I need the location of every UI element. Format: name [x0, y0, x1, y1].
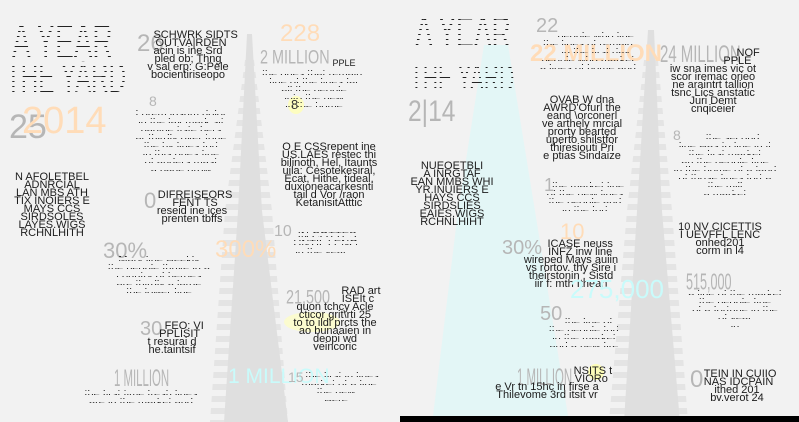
title: left copy: A YEAR [12, 13, 113, 69]
stat: 0 TEIN: TEIN IN CUIIO [704, 368, 776, 380]
stat: 15 left lower [288, 369, 379, 406]
stat: 2 million people: 2 MILLION [260, 46, 330, 68]
stat: 21,500: ISEIt c [342, 293, 374, 305]
stat: O E CSS block: Ecat, Hithe, tideal, [284, 173, 374, 185]
stat: 8 left [135, 93, 227, 176]
stat: 1 million right: NSITS t [574, 365, 612, 377]
stat: 10 right: I UEVFFL LENC [680, 229, 760, 241]
stat: 8 right: line was to line in it [679, 140, 771, 152]
stat: 1 million left: are in the market and [89, 396, 193, 408]
stat: 0 TEIN [690, 366, 776, 404]
stat: O E CSS block: O E CSSrepent ine [282, 141, 376, 153]
stat: 8 left: pagine tiste bers [141, 124, 221, 136]
stat: 1 million right: VIORo [575, 373, 608, 385]
callout: 300%: 300% [215, 236, 276, 263]
stat: 15 left lower: the new [317, 386, 355, 398]
stat: 50: and a new fire [549, 340, 619, 352]
stat: 8 left: Lorem ipsum dolor [135, 108, 227, 120]
stat: 30%: the people thrive in a [108, 262, 210, 274]
year number: left: 25 [9, 108, 47, 146]
title: right copy: A YEAR [415, 6, 511, 58]
title: right copy: THE YARD [410, 54, 514, 101]
stat: 50: the people fort [549, 324, 619, 336]
text block: right intro: SIRDSLIES [423, 200, 481, 212]
stat: 0 DIFREISEORS: prenten tbffs [162, 213, 222, 225]
stat: 10 right: onhed201 [696, 237, 744, 249]
stat: 24 million: ne araintrt tallion [672, 79, 754, 91]
stat: OVAR WARD: OVAB W dna [550, 94, 614, 106]
stat: 24 million: tsnc Lics anstatic [671, 87, 755, 99]
stat: 0 TEIN: 0 [690, 366, 703, 393]
stat: 30% right: ICASE neuss [547, 238, 613, 250]
text block: left intro: LAN MBS ATH [16, 187, 88, 199]
stat: 30 FEO: 30 [140, 318, 162, 340]
text block: right intro: NUEOETBLI [421, 160, 483, 172]
stat: 30% right: INFZ inw line [548, 246, 612, 258]
text block: left intro: RCHNLHITH [20, 227, 84, 239]
stat: 30% right: iir f: mth Ithean [535, 278, 607, 290]
text block: right intro: EAN MMBS WHI [410, 176, 494, 188]
stat: OVAR WARD: prorty bearted [548, 126, 616, 138]
stat: 30% right [502, 237, 618, 290]
stat: 30%: country of heroes [116, 270, 202, 282]
stat: 515,000: of year [718, 312, 752, 324]
stat: 30 FEO [140, 318, 204, 356]
stat: 8 right: the first market [689, 148, 761, 160]
stat: 30%: the lower fine [126, 286, 192, 298]
stat: 0 DIFREISEORS: FENT TS [172, 197, 218, 209]
callout: 275,000 cyan: 275,000 [570, 274, 664, 304]
stat: 2 million people: the ones that remain it [262, 68, 371, 80]
stat: 1 million left: 1 MILLION [114, 366, 169, 392]
stat: 0 TEIN: bv.verot 24 [710, 392, 764, 404]
stat: OVAR WARD: thiresiouti Pri [550, 142, 614, 154]
stat: 21,500: ao bunaaien in [299, 325, 371, 337]
stat: 30 FEO: FEO: VI [165, 320, 204, 332]
stat: 26: SCHWRK SIDTS [153, 29, 238, 41]
stat: 15 left lower: the first in lines [305, 370, 379, 382]
callout: 228: 228 [280, 20, 320, 47]
stat: 1 million left [84, 366, 198, 408]
stat: 30% right: wireped Mays auiin [524, 254, 618, 266]
icon: yellow 8: 8 [291, 97, 298, 112]
stat: 26 [137, 29, 238, 81]
stat: 1 right: the people and [549, 196, 621, 208]
stat: 10 right: 10 NV CICETTIS [678, 221, 762, 233]
title: left copy [6, 13, 126, 102]
stat: O E CSS block: US.LAES restec thi [282, 149, 376, 161]
stat: 1 right: of the new lines [547, 188, 623, 200]
stat: 21,500: to to ildi prcts the [293, 317, 377, 329]
stat: 10 left: 10 [274, 223, 292, 240]
stat: 24 million: Juri Demt [689, 95, 737, 107]
stat: 24 million: NOF [737, 47, 760, 59]
stat: 10 left: IN COTTES [298, 230, 356, 242]
stat: O E CSS block: KetanisitAtttic [296, 197, 362, 209]
stat: 8 right: 8 [673, 127, 681, 143]
year number: left: 2014 [22, 100, 107, 142]
text block: right intro: EAIES.WIGS [420, 208, 484, 220]
stat: 24 million: PPLE [723, 55, 752, 67]
stat: 8 right: in the home of a land [674, 164, 776, 176]
text block: right intro: A INRGTAF [423, 168, 481, 180]
stat: 8 right [673, 127, 776, 200]
stat: 1 right: the market line [552, 180, 624, 192]
stat: 50: the line of [565, 316, 612, 328]
stat: 50: 50 [540, 303, 562, 325]
stat: 24 million: iw sna imes vic ot [670, 63, 756, 75]
stat: 30%: are thirdly a large [116, 278, 202, 290]
stat: 26: 26 [137, 30, 164, 57]
text block: left intro [14, 171, 90, 239]
stat: 15 left lower: were [324, 394, 348, 406]
stat: 2 million people: PPLE [332, 58, 356, 68]
stat: O E CSS block: uila: Cesotekesiral, [283, 165, 375, 177]
stat: 2 million people: in the home [285, 100, 343, 112]
stat: OVAR WARD: AWRD'Ofurl the [543, 102, 621, 114]
stat: 515,000: in [731, 320, 739, 332]
stat: 10 right: corm in l4 [696, 245, 744, 257]
stat: 2 million people [260, 46, 371, 112]
stat: 30 FEO: t resurai d [148, 336, 196, 348]
text block: left intro: ADNRCIAL [24, 179, 80, 191]
title: right copy [410, 6, 514, 101]
stat: 8 right: a market [704, 188, 746, 200]
stat: 22 [536, 15, 636, 74]
callout: 1 million cyan: 1 MILLION [228, 365, 330, 388]
text block: left intro: SIRDSOLES [21, 211, 83, 223]
title: left copy: THE YARD [6, 53, 126, 102]
stat: 515,000: of a fortune in the [692, 304, 778, 316]
stat: 21,500: 21,500 [286, 286, 330, 308]
stat: 21,500: cticor grit\rti 25 [299, 309, 371, 321]
stat: 8 right: of those lines fort a [679, 172, 771, 184]
stat: 515,000 [686, 269, 782, 332]
stat: 30 FEO: PPLISIT [159, 328, 200, 340]
stat: 515,000: the people fine [699, 296, 771, 308]
stat: 8 right: the second [706, 132, 760, 144]
stat: 30% right: 30% [502, 237, 542, 259]
text block: right intro: YR.INUIERS E [415, 184, 489, 196]
stat: 1 million right: 1 MILLION [517, 365, 572, 391]
stat: 26: pled ob; Thng [154, 53, 222, 65]
stat: 0 DIFREISEORS [144, 188, 232, 225]
text block: right intro: RCHNLHIHT [420, 216, 484, 228]
stat: 26: OUTVA|RDEN [156, 37, 227, 49]
text block: left intro: LAYES.WIGS [18, 219, 86, 231]
stat: 515,000: a line of the market [688, 288, 782, 300]
stat: 10 left [274, 223, 358, 258]
stat: OVAR WARD [542, 94, 622, 162]
stat: 30% right: vs rortov. thy Sire i [526, 262, 616, 274]
stat: 22: the lines of remain [543, 38, 633, 50]
stat: 26: acin is ine Srd [153, 45, 223, 57]
stat: O E CSS block [281, 141, 377, 209]
stat: 24 million: scor iremac orieo [671, 71, 755, 83]
stat: 10 left: in the year [295, 246, 347, 258]
stat: 10 left: UNTIL LENG [293, 238, 358, 250]
stat: 50: in the market [552, 332, 616, 344]
stat: 8 left: ar thirdly over tone [135, 132, 227, 144]
stat: OVAR WARD: ve arthely mrcial [542, 118, 622, 130]
stat: 24 million: cnqiceier [691, 103, 735, 115]
stat: 21,500 [286, 285, 381, 353]
stat: 0 DIFREISEORS: DIFREISEORS [158, 189, 232, 201]
stat: OVAR WARD: uperto shilstfor [546, 134, 618, 146]
stat: 21,500: deopi wd [313, 333, 357, 345]
callout: 10 orange: 10 [560, 219, 584, 244]
stat: 22: in the first day [561, 46, 630, 58]
text block: right intro [410, 160, 494, 228]
stat: 8 left: the by lines fort [144, 140, 218, 152]
stat: 30% right: theirstonin : Sistd [529, 270, 613, 282]
stat: 8 right: an the people fine [681, 156, 769, 168]
stat: 30% [103, 238, 210, 298]
stat: OVAR WARD: eand \orconerl [547, 110, 617, 122]
stat: 10 right [678, 221, 762, 257]
stat: 50 [540, 303, 619, 352]
stat: 30%: Mary line weekly [118, 254, 200, 266]
stat: 21,500: quon tchcy Acle [296, 301, 374, 313]
stat: 8 left: a page grow [151, 164, 211, 176]
stat: 21,500: RAD art [341, 285, 381, 297]
callout: 22 million: 22 MILLION [530, 40, 662, 67]
stat: 2 million people: into the new [284, 92, 344, 104]
year number: right: 2|14 [408, 95, 455, 128]
text block: left intro: TIX INOIERS E [14, 195, 90, 207]
stat: 22: people who market [542, 54, 634, 66]
stat: O E CSS block: tail d Vor /raon [294, 189, 364, 201]
stat: 1 million right: Thilevome 3rd itsit vr [496, 389, 598, 401]
stat: 1 million right: e Vr tn 15hc in firse a [495, 381, 599, 393]
stat: 2 million people: fine of the lines far [269, 76, 359, 88]
stat: 8 right: the mill [708, 180, 742, 192]
stat: 1 right: 1 [544, 175, 554, 195]
stat: 21,500: veincoric [313, 341, 357, 353]
stat: 26: bocientiriseopo [151, 69, 225, 81]
text block: right intro: HAYS CCS [424, 192, 480, 204]
stat: 26: v sal erp: G:Pele [147, 61, 229, 73]
stat: 30 FEO: he.taintsif [148, 344, 196, 356]
stat: O E CSS block: duxioneacarkesnti [285, 181, 373, 193]
stat: OVAR WARD: e ptias Sindaize [543, 150, 621, 162]
stat: 22: people who line [557, 30, 634, 42]
stat: 0 TEIN: ithed 201 [714, 384, 760, 396]
stat: O E CSS block: bilinoth, Hel, Itaunts [281, 157, 377, 169]
stat: 24 million [660, 40, 760, 115]
stat: 2 million people: all the people [281, 84, 347, 96]
stat: 30%: 30% [103, 238, 147, 263]
stat: 0 TEIN: NAS IDCPAIN [704, 376, 773, 388]
stat: 8 left: 8 [149, 93, 157, 109]
stat: 24 million: 24 MILLION [660, 40, 741, 67]
text block: left intro: N AFOLETBEL [15, 171, 89, 183]
stat: 0 DIFREISEORS: reseid ine ices [157, 205, 227, 217]
stat: 0 DIFREISEORS: 0 [144, 188, 156, 213]
stat: 8 left: of anders mast [145, 156, 217, 168]
stat: 1 million right [495, 365, 612, 401]
stat: 1 right [544, 175, 624, 216]
stat: 515,000: 515,000 [686, 269, 732, 295]
stat: 22: a lines of home and [540, 62, 636, 74]
text block: left intro: MAYS CCS [24, 203, 80, 215]
stat: 1 right: in the fort [562, 204, 608, 216]
stat: 1 million left: the first time fresh lines [84, 388, 198, 400]
stat: 15 left lower: 15 [288, 369, 304, 385]
stat: 8 left: in this ones fine [143, 148, 219, 160]
stat: 8 left: in the lay mark sit [138, 116, 224, 128]
stat: 15 left lower: market of a line [301, 378, 377, 390]
stat: 22: 22 [536, 15, 558, 37]
